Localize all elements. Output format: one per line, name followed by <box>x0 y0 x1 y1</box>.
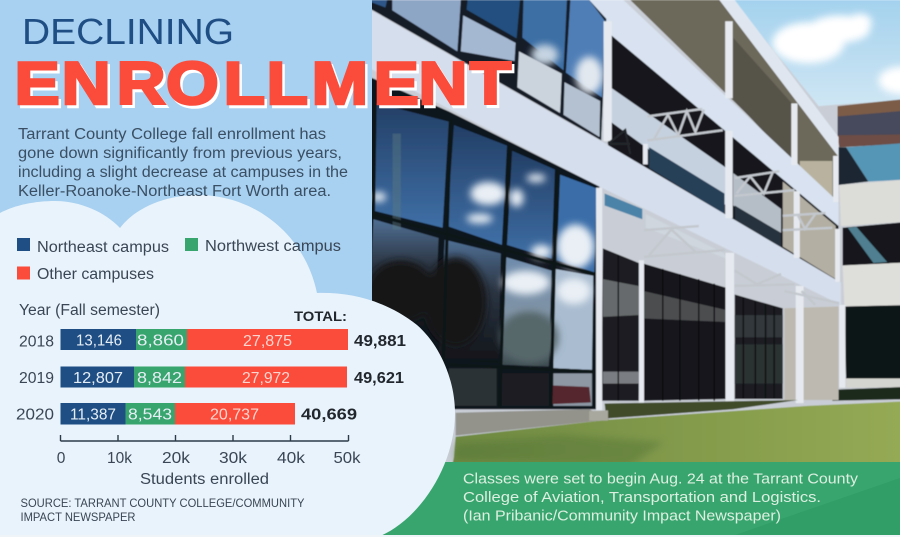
caption text <box>463 472 859 524</box>
source note <box>20 496 304 524</box>
bar: 2018 <box>19 329 406 350</box>
bar: 2020: 2020 <box>16 406 54 424</box>
lawn and sidewalk <box>456 409 610 436</box>
x axis: 0 <box>57 450 66 467</box>
intro text: including a slight decrease at campuses in the <box>18 164 348 181</box>
bar: 2018: 49,881 <box>354 333 406 350</box>
intro text: Tarrant County College fall enrollment has <box>18 126 326 143</box>
x axis: 20k <box>162 450 190 467</box>
fascia B <box>370 10 841 305</box>
x axis: Students enrolled <box>140 471 269 488</box>
cloud reflections <box>371 174 594 304</box>
chart headings <box>19 302 347 324</box>
source note: SOURCE: TARRANT COUNTY COLLEGE/COMMUNITY <box>20 496 304 510</box>
window mullions lower <box>372 103 594 408</box>
title: DECLINING <box>22 11 234 52</box>
source note: IMPACT NEWSPAPER <box>20 510 136 524</box>
fascia A <box>589 0 839 226</box>
bar: 2020: 40,669 <box>301 406 357 424</box>
legend: Other campuses <box>37 266 154 283</box>
small blue windows <box>605 194 642 219</box>
caption text: College of Aviation, Transportation and Logistics. <box>463 490 821 506</box>
green caption band <box>372 462 900 535</box>
chart headings: Year (Fall semester) <box>19 302 160 319</box>
window panes: top left <box>370 0 387 8</box>
bar: 2019: 2019 <box>19 370 54 387</box>
right wing <box>838 98 900 117</box>
window panes: main <box>373 103 449 228</box>
columns <box>596 21 845 410</box>
recessed upper balcony ceiling <box>630 0 839 204</box>
intro text <box>18 126 348 200</box>
title: ENROLLMENT <box>15 50 511 117</box>
x axis: 30k <box>219 450 247 467</box>
bar: 2019: 27,972 <box>242 370 290 387</box>
x axis: 50k <box>334 450 361 467</box>
bar: 2020: 20,737 <box>210 406 259 424</box>
bar: 2020 <box>16 403 357 424</box>
photo: college building <box>367 0 900 537</box>
bar: 2019 <box>19 366 404 388</box>
x axis: 40k <box>277 450 305 467</box>
stacked bar chart <box>16 302 406 488</box>
bar: 2019: 8,842 <box>137 370 182 387</box>
ground floor windows <box>601 248 641 401</box>
tree reflection <box>367 257 486 346</box>
bar: 2019: 12,807 <box>73 370 123 387</box>
upper-left windows frame <box>370 0 606 140</box>
intro text: gone down significantly from previous years, <box>18 145 342 162</box>
intro text: Keller-Roanoke-Northeast Fort Worth area. <box>18 183 331 200</box>
blue windows in recess <box>649 147 724 214</box>
recessed white walls <box>608 86 726 206</box>
dark recess below fascia A <box>608 31 839 283</box>
legend: Northeast campus <box>37 239 169 256</box>
caption text: Classes were set to begin Aug. 24 at the Tarrant County <box>463 472 859 488</box>
x axis <box>57 435 361 488</box>
clouds <box>772 14 900 94</box>
bar: 2020: 11,387 <box>70 406 116 424</box>
pale wall bay <box>784 307 839 400</box>
bar: 2020: 8,543 <box>128 406 172 424</box>
bar: 2018: 2018 <box>19 334 54 350</box>
bar: 2019: 49,621 <box>354 370 404 387</box>
cloud panel <box>0 195 455 537</box>
title: ENROLLMENT <box>17 53 514 120</box>
legend <box>17 238 341 283</box>
chart headings: TOTAL: <box>294 308 347 324</box>
title <box>15 11 514 120</box>
trusses <box>644 109 839 305</box>
sky <box>733 0 900 106</box>
bar: 2018: 13,146 <box>76 332 122 350</box>
lower-left window frame <box>370 77 599 409</box>
bar: 2018: 8,860 <box>137 332 184 350</box>
left sky panel <box>0 0 372 537</box>
bar: 2018: 27,875 <box>243 333 292 350</box>
roof fascia <box>719 0 839 157</box>
x axis: 10k <box>107 450 132 467</box>
caption text: (Ian Pribanic/Community Impact Newspaper) <box>463 508 781 524</box>
legend: Northwest campus <box>205 238 341 255</box>
